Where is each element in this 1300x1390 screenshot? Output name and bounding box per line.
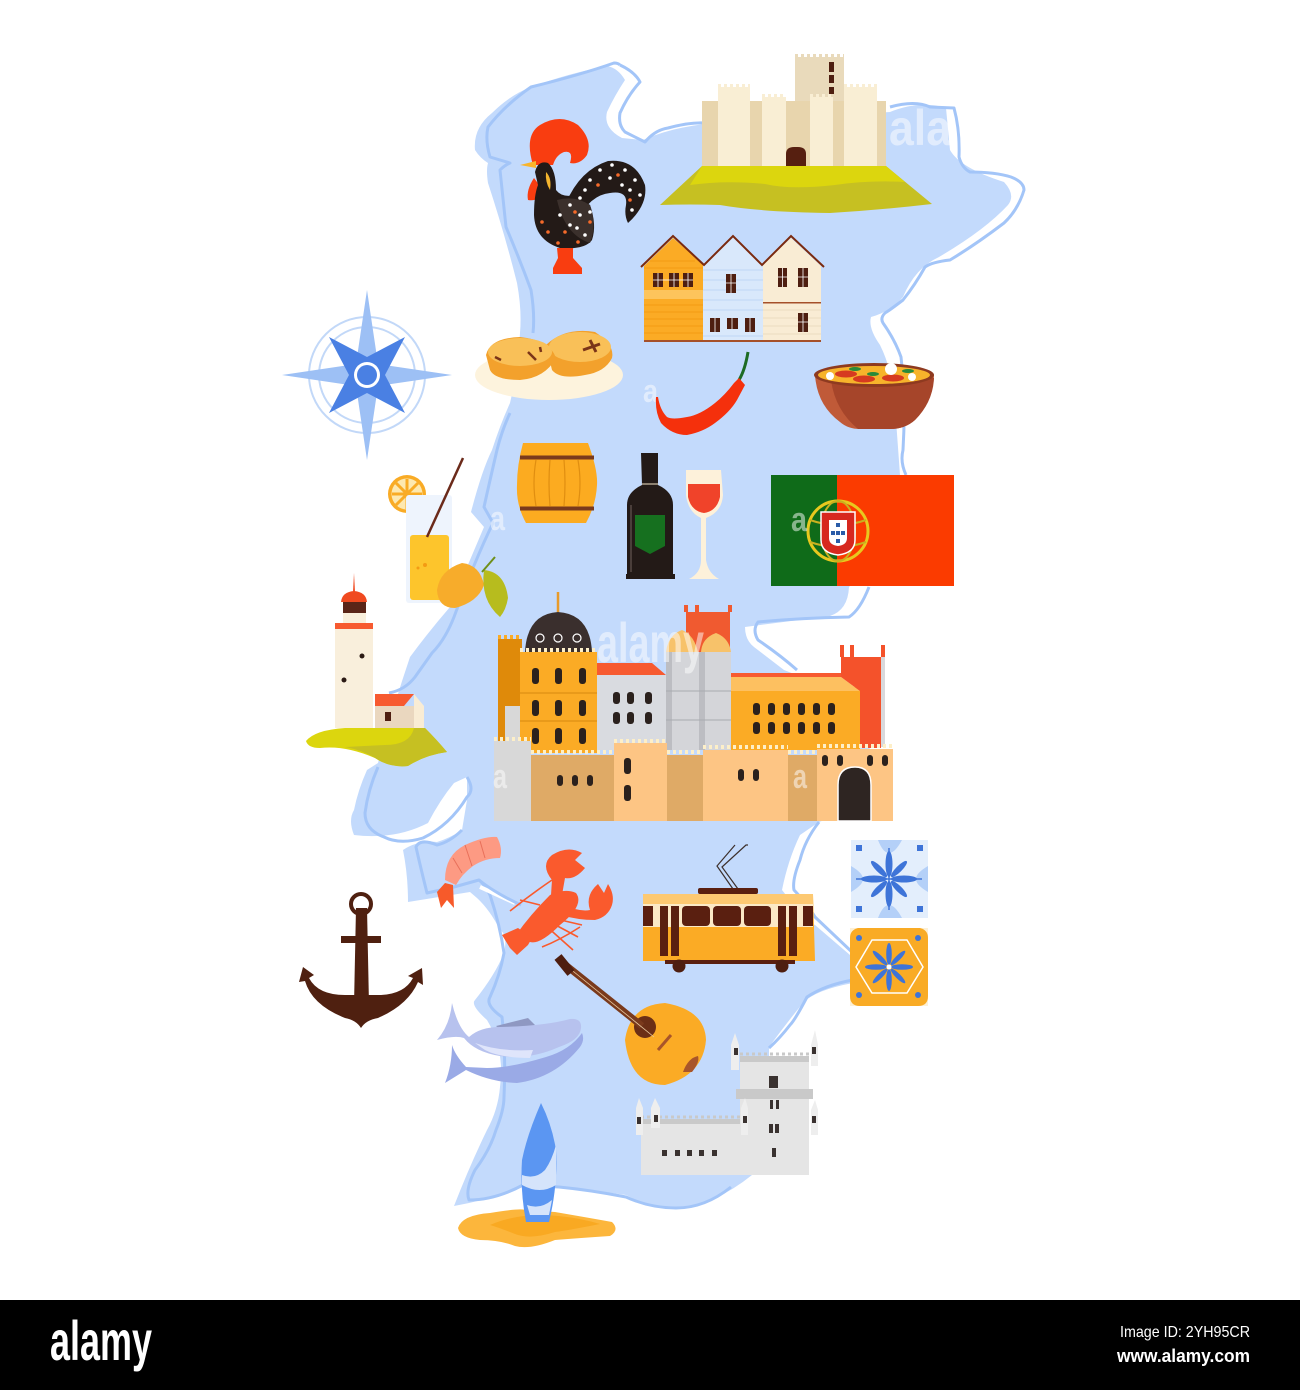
castle door <box>786 147 806 166</box>
island <box>306 728 447 766</box>
shield <box>821 512 855 555</box>
rings <box>309 317 425 433</box>
upper fish <box>437 1003 581 1057</box>
crenellations <box>531 741 893 752</box>
pantograph <box>717 845 748 889</box>
palace watermark <box>493 501 808 796</box>
tile ground <box>851 840 928 918</box>
soup <box>818 366 930 384</box>
spire <box>353 573 355 592</box>
lower fish <box>445 1033 583 1083</box>
small grey turret <box>505 706 522 746</box>
sardines <box>437 1003 583 1083</box>
sound hole <box>634 1016 656 1038</box>
hill <box>660 166 932 213</box>
wheels <box>672 960 686 972</box>
orange house <box>644 238 703 342</box>
turrets <box>636 1030 818 1135</box>
soup bowl <box>814 363 934 429</box>
website: www.alamy.com <box>1116 1346 1250 1366</box>
front walls <box>531 755 614 821</box>
upper cream band <box>643 894 813 927</box>
centre <box>354 362 380 388</box>
palace watermark: a <box>793 758 808 796</box>
anchor <box>299 894 423 1028</box>
right claw <box>560 884 613 920</box>
windows <box>653 268 808 332</box>
plate <box>475 350 623 400</box>
toppings <box>835 370 904 382</box>
tile ground <box>850 928 928 1006</box>
undercarriage <box>665 960 795 964</box>
upper fish belly <box>475 1043 533 1058</box>
Belem tower <box>636 1030 818 1175</box>
cream house <box>763 238 821 342</box>
yellow azulejo tile <box>850 928 928 1006</box>
comb <box>530 119 589 165</box>
palace watermark: a <box>791 501 808 539</box>
keeper house <box>375 694 424 728</box>
right yellow wing <box>731 687 860 750</box>
image id: Image ID: 2YH95CR <box>1120 1324 1250 1341</box>
straw <box>427 458 463 537</box>
chili pepper <box>656 352 748 435</box>
stock <box>341 936 381 943</box>
bands <box>520 458 594 508</box>
rooster of Barcelos <box>520 119 645 274</box>
armillary sphere <box>808 501 868 561</box>
shrimp <box>437 837 501 908</box>
neck <box>563 963 642 1026</box>
wine barrel <box>517 443 597 523</box>
Portuguese guitar <box>558 957 706 1085</box>
shank <box>354 908 369 1005</box>
lemon <box>437 563 484 608</box>
shell segments <box>453 841 485 873</box>
blue house <box>703 238 763 342</box>
yellow tower <box>520 652 597 753</box>
keep tower <box>795 57 844 117</box>
gallery <box>335 623 373 629</box>
wine glass <box>686 470 723 579</box>
lighthouse tower <box>335 628 373 728</box>
diagonal points <box>329 337 405 413</box>
legs and antennae <box>510 880 582 950</box>
front left grey tower <box>494 741 531 821</box>
map fill <box>351 66 1011 1208</box>
surfboard on sand <box>458 1103 616 1247</box>
left orange tower <box>498 639 522 744</box>
leaf <box>483 570 508 617</box>
flower <box>861 851 917 907</box>
lantern <box>343 602 366 613</box>
right red tower <box>841 657 881 748</box>
windows <box>643 906 813 956</box>
tart left <box>486 337 556 380</box>
pasteis de nata <box>475 331 623 400</box>
stand <box>553 248 582 274</box>
grey wing <box>597 675 666 750</box>
cardinal points <box>282 290 452 460</box>
bridge <box>658 1035 671 1050</box>
wine <box>688 484 720 513</box>
upper fish fin <box>496 1018 538 1034</box>
wine bottle <box>626 453 675 579</box>
bowl <box>815 375 934 429</box>
body <box>643 894 815 961</box>
body <box>534 162 594 248</box>
eye marking <box>546 172 550 190</box>
tower windows <box>829 62 834 94</box>
pick guard <box>683 1056 698 1072</box>
dome <box>341 591 367 602</box>
arms <box>299 967 423 1028</box>
upper claw <box>546 849 585 895</box>
blue azulejo tile <box>851 840 928 918</box>
domed grey tower <box>666 652 731 750</box>
low bastion <box>641 1123 741 1175</box>
Pena palace <box>494 592 893 821</box>
tower windows <box>360 654 364 658</box>
rim <box>814 363 934 387</box>
inner coastline <box>365 63 1024 1208</box>
siding <box>644 261 703 333</box>
green field <box>771 475 837 586</box>
lobster tail <box>502 928 532 955</box>
citrus slice <box>388 475 426 513</box>
hexagon <box>856 940 923 993</box>
main tower <box>740 1056 809 1175</box>
staves <box>534 460 580 506</box>
curtain wall <box>702 101 886 166</box>
juice <box>410 535 449 600</box>
dome <box>525 612 592 652</box>
beak <box>520 161 536 168</box>
glass bowl <box>686 470 723 579</box>
footer bar <box>0 1300 1300 1390</box>
black band <box>0 1300 1300 1390</box>
watermark text: ala <box>889 100 952 156</box>
yellow tower windows <box>532 668 586 744</box>
palace watermark: alamy <box>597 611 704 674</box>
roofs <box>641 236 824 267</box>
bottle <box>626 453 675 579</box>
map: Portugal <box>351 63 1024 1208</box>
compass rose <box>282 290 452 460</box>
watermark text: a <box>643 373 658 409</box>
wall towers <box>718 87 750 166</box>
tram <box>643 845 815 972</box>
castle on hill <box>660 56 932 213</box>
pepper body <box>656 378 745 435</box>
Portuguese flag <box>771 475 954 586</box>
barrel body <box>517 443 597 523</box>
watermark text <box>490 100 952 538</box>
watermark text: a <box>490 500 506 538</box>
shrimp tail <box>437 883 454 908</box>
twig <box>482 557 495 572</box>
headstock <box>558 957 571 973</box>
palace watermark: a <box>493 758 508 796</box>
tail <box>566 161 645 223</box>
highlight <box>630 505 632 572</box>
flower <box>865 943 913 991</box>
rear red tower <box>686 612 730 652</box>
row of houses <box>641 236 824 342</box>
label <box>635 515 665 554</box>
orange juice and lemon <box>388 458 508 617</box>
lobster <box>502 849 613 955</box>
lobster body <box>516 891 578 942</box>
front windows <box>557 755 888 801</box>
red field <box>837 475 954 586</box>
glass <box>406 495 452 603</box>
corner marks <box>856 935 921 998</box>
surfboard <box>522 1103 556 1222</box>
board stripes <box>522 1145 556 1190</box>
dots <box>558 163 642 237</box>
alamy logo: alamy <box>50 1309 152 1372</box>
gate <box>838 767 871 821</box>
stem <box>739 352 748 380</box>
wattle <box>528 178 543 200</box>
tart right <box>546 331 612 377</box>
window mullions <box>653 268 808 332</box>
ring <box>351 894 371 914</box>
body <box>625 1003 706 1085</box>
windows <box>637 1047 816 1157</box>
sand <box>458 1209 616 1247</box>
roof <box>698 888 758 894</box>
trim <box>644 290 703 299</box>
shrimp body <box>445 837 501 885</box>
lighthouse on island <box>306 573 447 766</box>
